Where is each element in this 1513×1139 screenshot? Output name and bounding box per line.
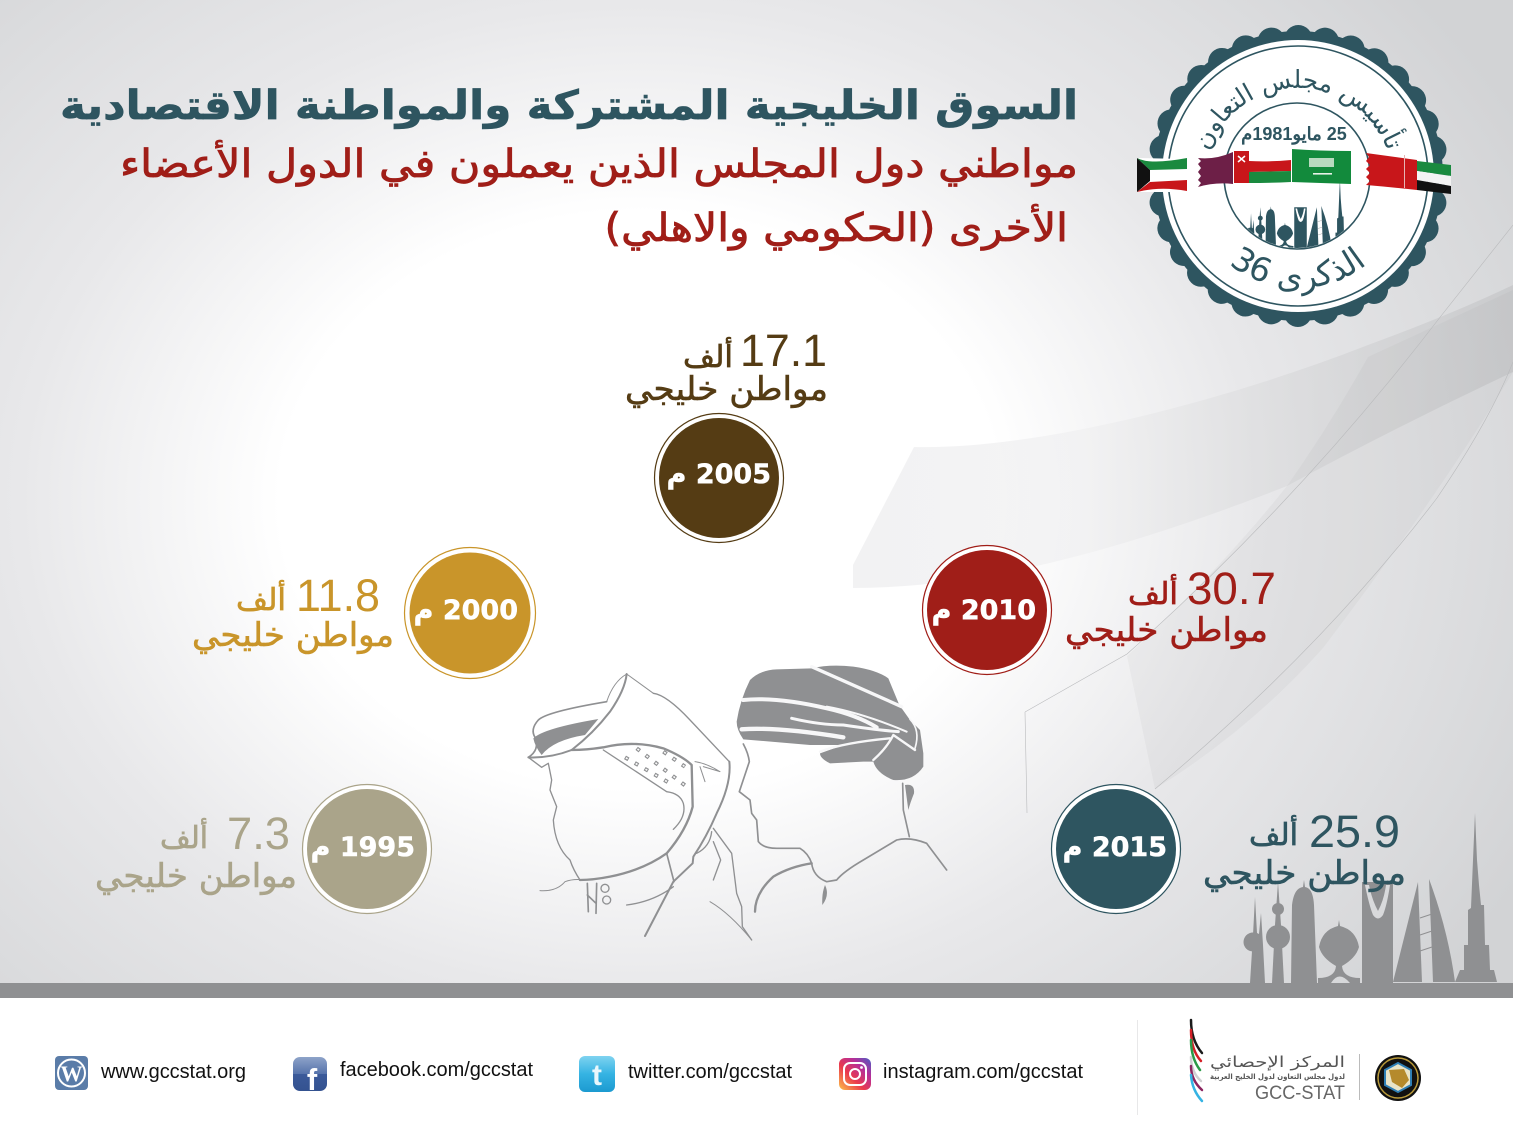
year circle: 2010 م <box>932 595 1036 626</box>
icon: twitter: t <box>592 1059 602 1092</box>
unit: ألف <box>683 336 733 375</box>
unit: ألف <box>1128 573 1178 612</box>
man <box>737 666 947 912</box>
year circle: 2005 م <box>667 459 771 490</box>
logo latin name: GCC-STAT <box>1255 1083 1345 1104</box>
GCC emblem <box>1375 1055 1421 1101</box>
caption: مواطن خليجي <box>192 615 394 654</box>
milestone: 2015 <box>1052 784 1406 914</box>
year circle <box>922 546 1052 674</box>
caption: مواطن خليجي <box>95 856 297 895</box>
logo Arabic name: المركز الإحصائي <box>1210 1053 1345 1072</box>
year circle: 2015 م <box>1063 832 1167 863</box>
ground bar <box>0 983 1513 998</box>
illustration: Gulf woman and man <box>528 666 947 940</box>
badge top arc text: تأسيس مجلس التعاون <box>1200 69 1407 150</box>
year circle <box>302 784 432 914</box>
value 25.9: 25.9 <box>1309 806 1400 857</box>
year circle: 1995 م <box>311 832 415 863</box>
twitter link: twitter.com/gccstat <box>628 1061 792 1083</box>
year circle <box>654 414 784 542</box>
subtitle line 2: الأخرى (الحكومي والاهلي) <box>605 204 1068 251</box>
milestone: 2000 <box>192 548 536 678</box>
icon: wordpress: W <box>60 1061 82 1086</box>
unit: ألف <box>1249 814 1298 853</box>
anniversary badge <box>1137 25 1451 327</box>
unit: ألف <box>236 579 286 618</box>
instagram link: instagram.com/gccstat <box>883 1061 1083 1083</box>
badge bottom arc text: الذكرى 36 <box>1231 246 1365 296</box>
logo ribbon <box>1191 1020 1202 1101</box>
year circle <box>404 548 536 678</box>
caption: مواطن خليجي <box>625 369 828 408</box>
icon: twitter <box>579 1056 615 1092</box>
logo Arabic subtitle: لدول مجلس التعاون لدول الخليج العربية <box>1210 1072 1345 1081</box>
website link: www.gccstat.org <box>100 1061 246 1083</box>
footer <box>0 998 1513 1139</box>
year circle <box>1052 784 1180 914</box>
flags <box>1137 149 1451 194</box>
subtitle line 1: مواطني دول المجلس الذين يعملون في الدول الأعضاء <box>120 139 1078 187</box>
flag: Saudi Arabia <box>1292 149 1351 184</box>
skyline: right corner <box>1244 813 1497 983</box>
flag: Bahrain <box>1366 153 1417 190</box>
flag: Oman <box>1234 151 1291 183</box>
flag: Qatar <box>1198 152 1233 187</box>
milestone: 2005 <box>625 325 828 542</box>
icon: instagram <box>839 1058 871 1090</box>
flag: Kuwait <box>1137 158 1187 192</box>
badge date: 25 مايو1981م <box>1241 124 1347 145</box>
icon: facebook <box>293 1057 327 1097</box>
value 7.3: 7.3 <box>227 808 290 859</box>
badge skyline <box>1248 184 1344 248</box>
flag: UAE <box>1417 161 1451 194</box>
value 11.8: 11.8 <box>296 570 380 621</box>
woman <box>528 674 752 940</box>
icon: facebook: f <box>307 1062 318 1097</box>
value 30.7: 30.7 <box>1187 563 1276 614</box>
icon: wordpress <box>55 1056 88 1090</box>
milestone: 1995 <box>95 784 432 914</box>
caption: مواطن خليجي <box>1203 853 1406 892</box>
caption: مواطن خليجي <box>1065 610 1268 649</box>
GCC-STAT logo <box>1137 1020 1421 1115</box>
year circle: 2000 م <box>414 595 518 626</box>
facebook link: facebook.com/gccstat <box>340 1059 533 1081</box>
unit: ألف <box>160 817 208 856</box>
milestone: 2010 <box>922 546 1276 674</box>
value 17.1: 17.1 <box>740 325 827 376</box>
title: السوق الخليجية المشتركة والمواطنة الاقتصادية <box>60 83 1078 129</box>
